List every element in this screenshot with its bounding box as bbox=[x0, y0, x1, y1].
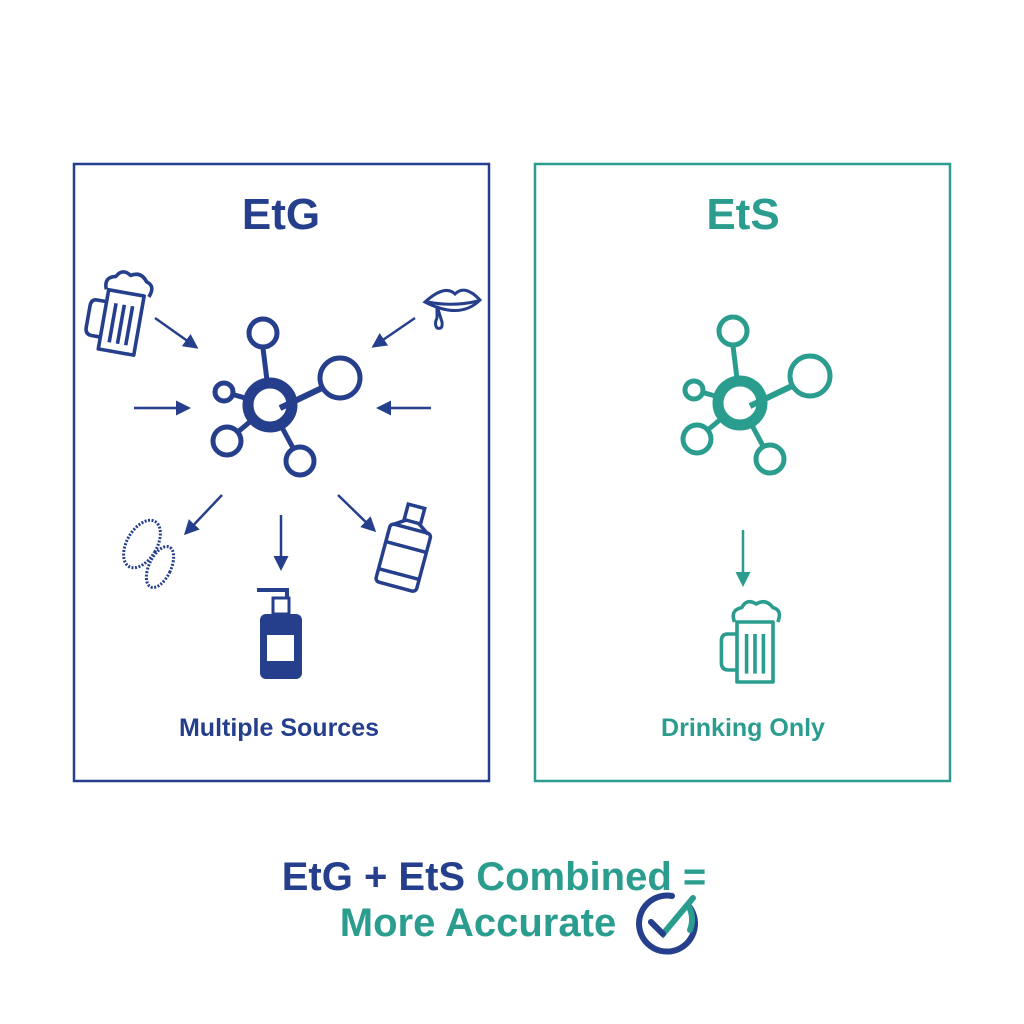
label: Drinking Only: Drinking Only bbox=[661, 714, 825, 742]
panel: EtG bbox=[74, 164, 489, 781]
icon: lips bbox=[425, 290, 480, 328]
molecule: EtS bbox=[683, 317, 830, 473]
conclusion text: EtG + EtS Combined = bbox=[282, 855, 706, 899]
icon: bacteria bbox=[116, 514, 179, 592]
panel: EtS bbox=[535, 164, 950, 781]
heading: EtS: EtS bbox=[706, 190, 780, 239]
arrow: down bbox=[742, 530, 744, 584]
molecule: EtG bbox=[213, 319, 360, 475]
heading: EtG: EtG bbox=[242, 190, 320, 239]
icon: mouthwash bottle bbox=[375, 501, 437, 592]
label: Multiple Sources: Multiple Sources bbox=[179, 714, 379, 742]
icon: beer mug bbox=[721, 602, 779, 682]
arrows: into molecule bbox=[134, 318, 431, 568]
conclusion text bbox=[282, 855, 706, 945]
conclusion text: More Accurate bbox=[340, 901, 616, 945]
icon: check mark bbox=[639, 896, 695, 952]
icon: beer mug bbox=[83, 267, 154, 356]
icon: hand soap bottle bbox=[257, 590, 302, 679]
